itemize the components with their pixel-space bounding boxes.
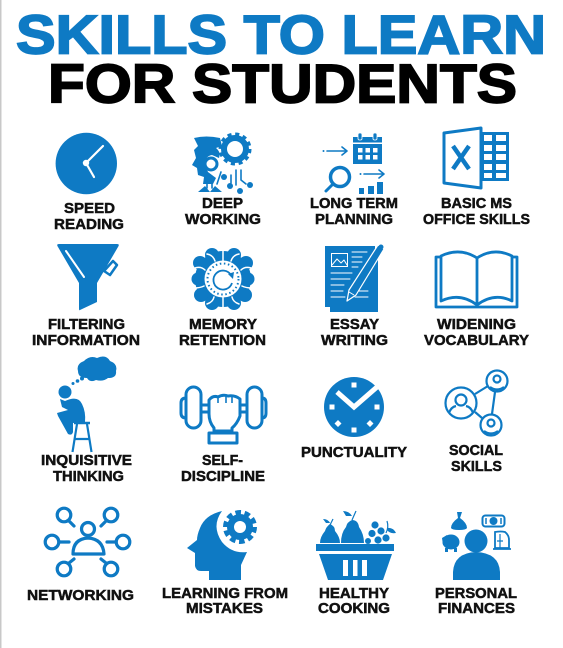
label: speed reading: SPEED bbox=[64, 201, 115, 217]
label: essay writing: ESSAY bbox=[330, 317, 379, 333]
icon: brain with circular arrow bbox=[192, 247, 254, 311]
icon: stopwatch clock bbox=[56, 133, 117, 194]
label: speed reading: READING bbox=[54, 217, 124, 233]
label: speed reading bbox=[54, 201, 124, 233]
panel: self-discipline bbox=[181, 387, 266, 485]
icon: open book bbox=[436, 252, 517, 307]
icon: funnel bbox=[57, 244, 119, 310]
label: social skills: SKILLS bbox=[451, 459, 502, 475]
panel: speed reading bbox=[54, 133, 124, 233]
label: self-discipline: DISCIPLINE bbox=[181, 469, 265, 485]
panel: social skills bbox=[446, 370, 508, 475]
label: social skills: SOCIAL bbox=[449, 443, 503, 459]
label: personal finances: PERSONAL bbox=[435, 586, 517, 602]
label: widening vocabulary bbox=[424, 317, 529, 349]
label: punctuality: PUNCTUALITY bbox=[301, 445, 407, 461]
label: filtering information bbox=[32, 317, 140, 349]
panel: long term planning bbox=[310, 133, 398, 228]
icon: person with money items bbox=[442, 512, 511, 580]
panel: learning from mistakes bbox=[162, 511, 288, 617]
panel: networking bbox=[27, 508, 134, 604]
label: personal finances: FINANCES bbox=[438, 601, 515, 617]
panel: widening vocabulary bbox=[424, 252, 529, 349]
label: long term planning: LONG TERM bbox=[310, 196, 398, 212]
label: memory retention bbox=[179, 317, 266, 349]
label: memory retention: RETENTION bbox=[179, 333, 266, 349]
label: filtering information: INFORMATION bbox=[32, 333, 140, 349]
label: learning from mistakes: MISTAKES bbox=[186, 601, 263, 617]
icon: thinker on stool with cloud bbox=[57, 357, 116, 452]
label: inquisitive thinking bbox=[41, 453, 132, 485]
icon: wall clock bbox=[324, 377, 384, 437]
label: self-discipline bbox=[181, 453, 265, 485]
label: deep working: DEEP bbox=[202, 196, 243, 212]
label: deep working bbox=[185, 196, 261, 228]
panel: memory retention bbox=[179, 247, 266, 349]
label: widening vocabulary: VOCABULARY bbox=[424, 333, 529, 349]
label: healthy cooking bbox=[318, 586, 390, 617]
label: essay writing: WRITING bbox=[321, 333, 388, 349]
label: healthy cooking: HEALTHY bbox=[319, 586, 389, 602]
label: basic ms office skills: OFFICE SKILLS bbox=[423, 212, 530, 228]
panel: healthy cooking bbox=[316, 511, 396, 617]
label: basic ms office skills: BASIC MS bbox=[441, 196, 512, 212]
label: deep working: WORKING bbox=[185, 212, 261, 228]
panel: inquisitive thinking bbox=[41, 357, 132, 485]
panel: basic ms office skills bbox=[423, 128, 530, 228]
label: long term planning bbox=[310, 196, 398, 228]
icon: spreadsheet book bbox=[444, 128, 509, 188]
title bbox=[16, 4, 546, 114]
label: basic ms office skills bbox=[423, 196, 530, 228]
label: social skills bbox=[449, 443, 503, 475]
label: healthy cooking: COOKING bbox=[318, 601, 390, 617]
icon: person with nodes bbox=[45, 508, 130, 576]
icon: calendar, magnifier, arrows and bars bbox=[322, 133, 384, 194]
title: SKILLS TO LEARN bbox=[16, 4, 546, 66]
label: learning from mistakes: LEARNING FROM bbox=[162, 586, 288, 602]
icon: document with pencil bbox=[325, 244, 384, 312]
panel: punctuality bbox=[301, 377, 407, 461]
panel: essay writing bbox=[321, 244, 388, 349]
panel: filtering information bbox=[32, 244, 140, 349]
icon: connected people bbox=[446, 370, 508, 436]
label: memory retention: MEMORY bbox=[189, 317, 257, 333]
label: personal finances bbox=[435, 586, 517, 617]
icon: fist gripping dumbbell bbox=[181, 387, 266, 443]
panel: deep working bbox=[185, 134, 261, 228]
label: networking: NETWORKING bbox=[27, 588, 134, 604]
icon: fruit basket bbox=[316, 511, 396, 580]
label: widening vocabulary: WIDENING bbox=[437, 317, 516, 333]
icon: head silhouette with gear bbox=[187, 511, 254, 580]
panel: personal finances bbox=[435, 512, 517, 617]
label: essay writing bbox=[321, 317, 388, 349]
icon: head with gears and circuit bbox=[192, 134, 253, 194]
label: inquisitive thinking: THINKING bbox=[53, 469, 124, 485]
label: inquisitive thinking: INQUISITIVE bbox=[41, 453, 132, 469]
label: learning from mistakes bbox=[162, 586, 288, 617]
label: filtering information: FILTERING bbox=[48, 317, 125, 333]
label: long term planning: PLANNING bbox=[315, 212, 393, 228]
title: FOR STUDENTS bbox=[48, 52, 517, 114]
label: self-discipline: SELF- bbox=[202, 453, 243, 469]
